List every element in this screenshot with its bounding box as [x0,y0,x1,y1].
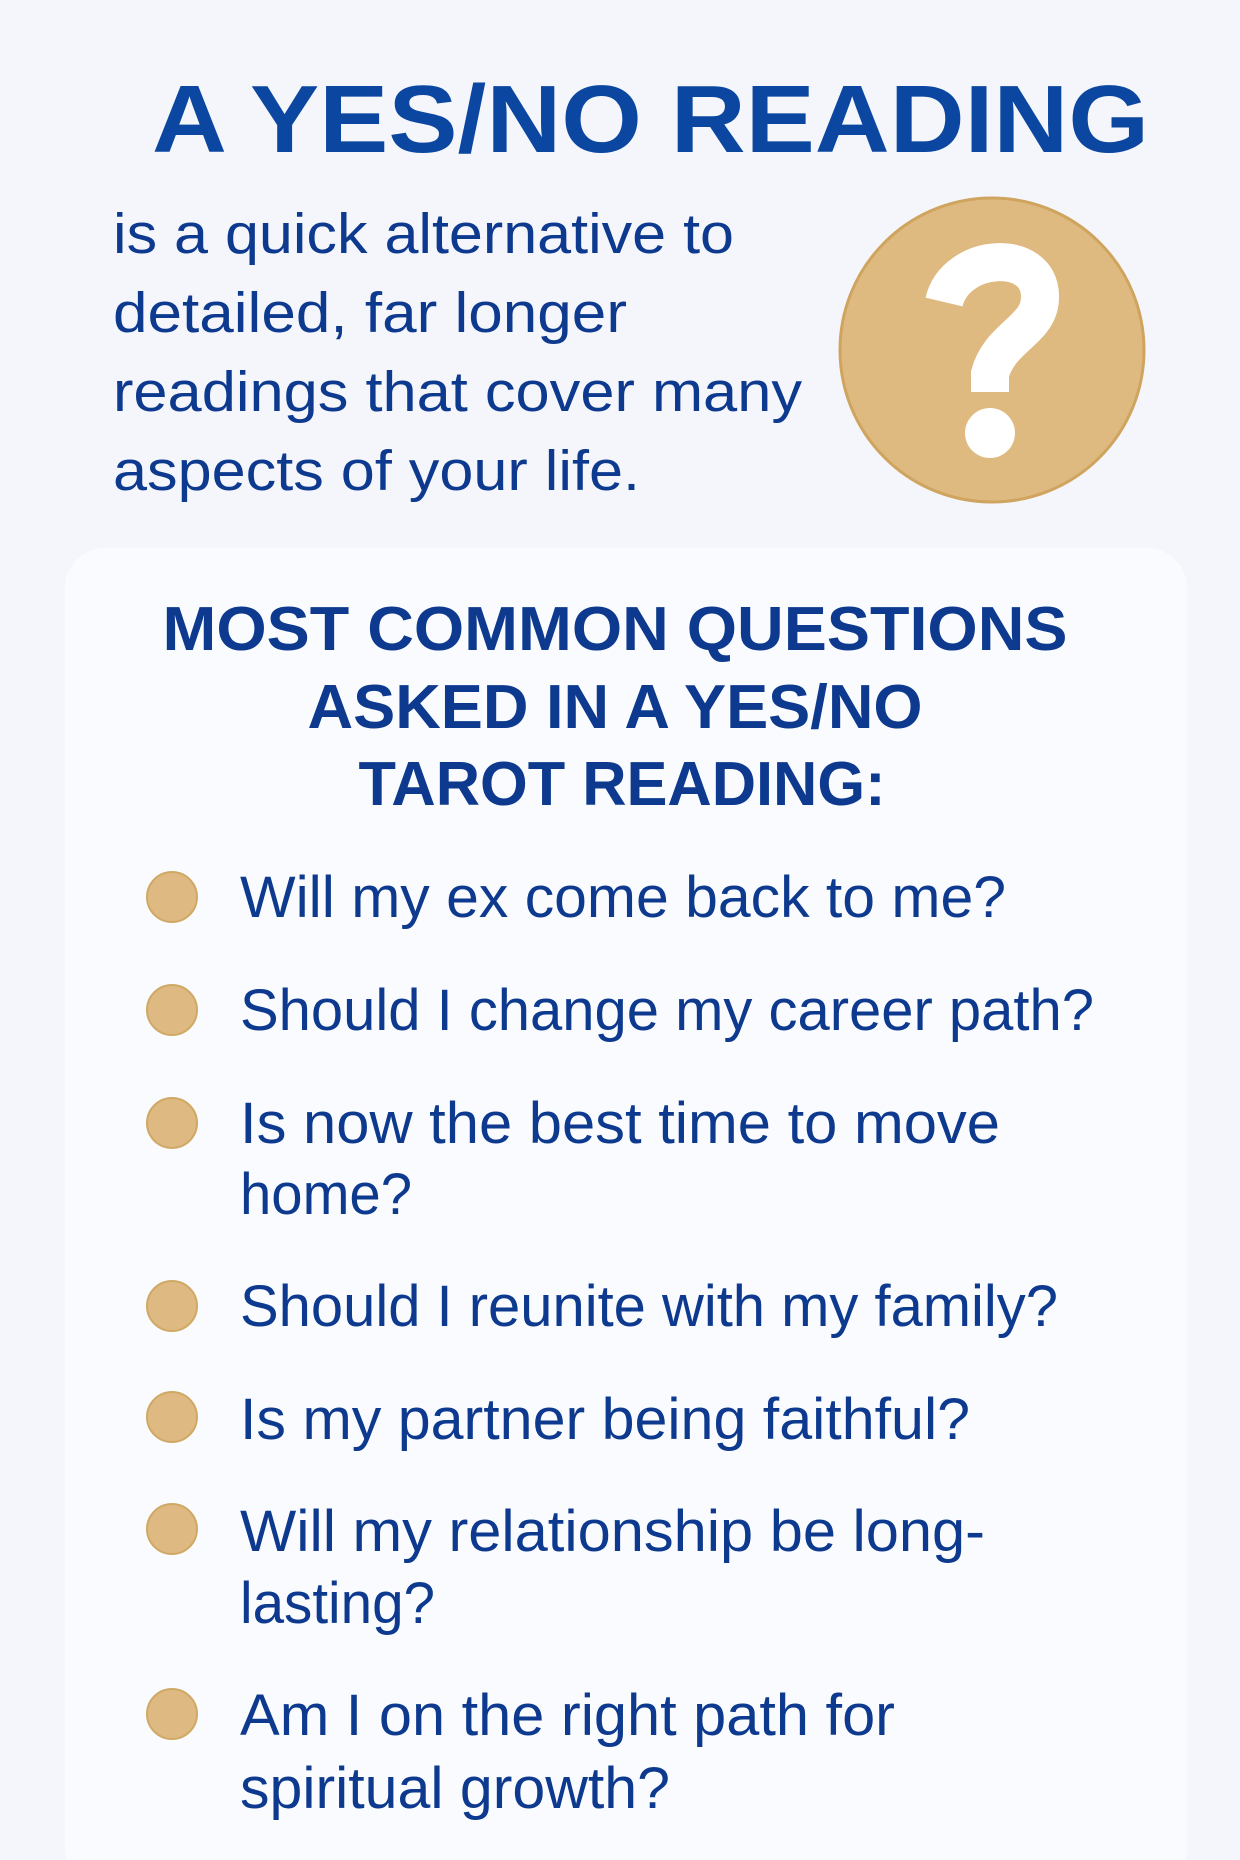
bullet list: Will my ex come back to me? [240,865,1006,930]
heading: TAROT READING: [358,750,886,819]
bullet list: Is my partner being faithful? [240,1387,970,1452]
heading: ASKED IN A YES/NO [308,673,922,742]
intro text: aspects of your life. [113,439,640,503]
intro text: readings that cover many [113,360,803,424]
bullet list: Is now the best time to move [240,1091,1000,1156]
bullet list: Should I reunite with my family? [240,1274,1058,1339]
intro text: detailed, far longer [113,281,627,345]
intro text [113,202,803,503]
panel: common questions [65,548,1187,1860]
bullet list: Will my relationship be long- [240,1499,985,1564]
icon: question mark circle [840,198,1144,502]
title: A YES/NO READING [152,66,1149,173]
intro text: is a quick alternative to [113,202,734,266]
bullet list: Should I change my career path? [240,978,1094,1043]
bullet list: spiritual growth? [240,1756,670,1821]
bullet list [147,865,1094,1821]
heading [162,595,1068,819]
bullet list: lasting? [240,1571,435,1636]
bullet list: home? [240,1162,412,1227]
bullet list: Am I on the right path for [240,1683,895,1748]
heading: MOST COMMON QUESTIONS [162,595,1068,664]
